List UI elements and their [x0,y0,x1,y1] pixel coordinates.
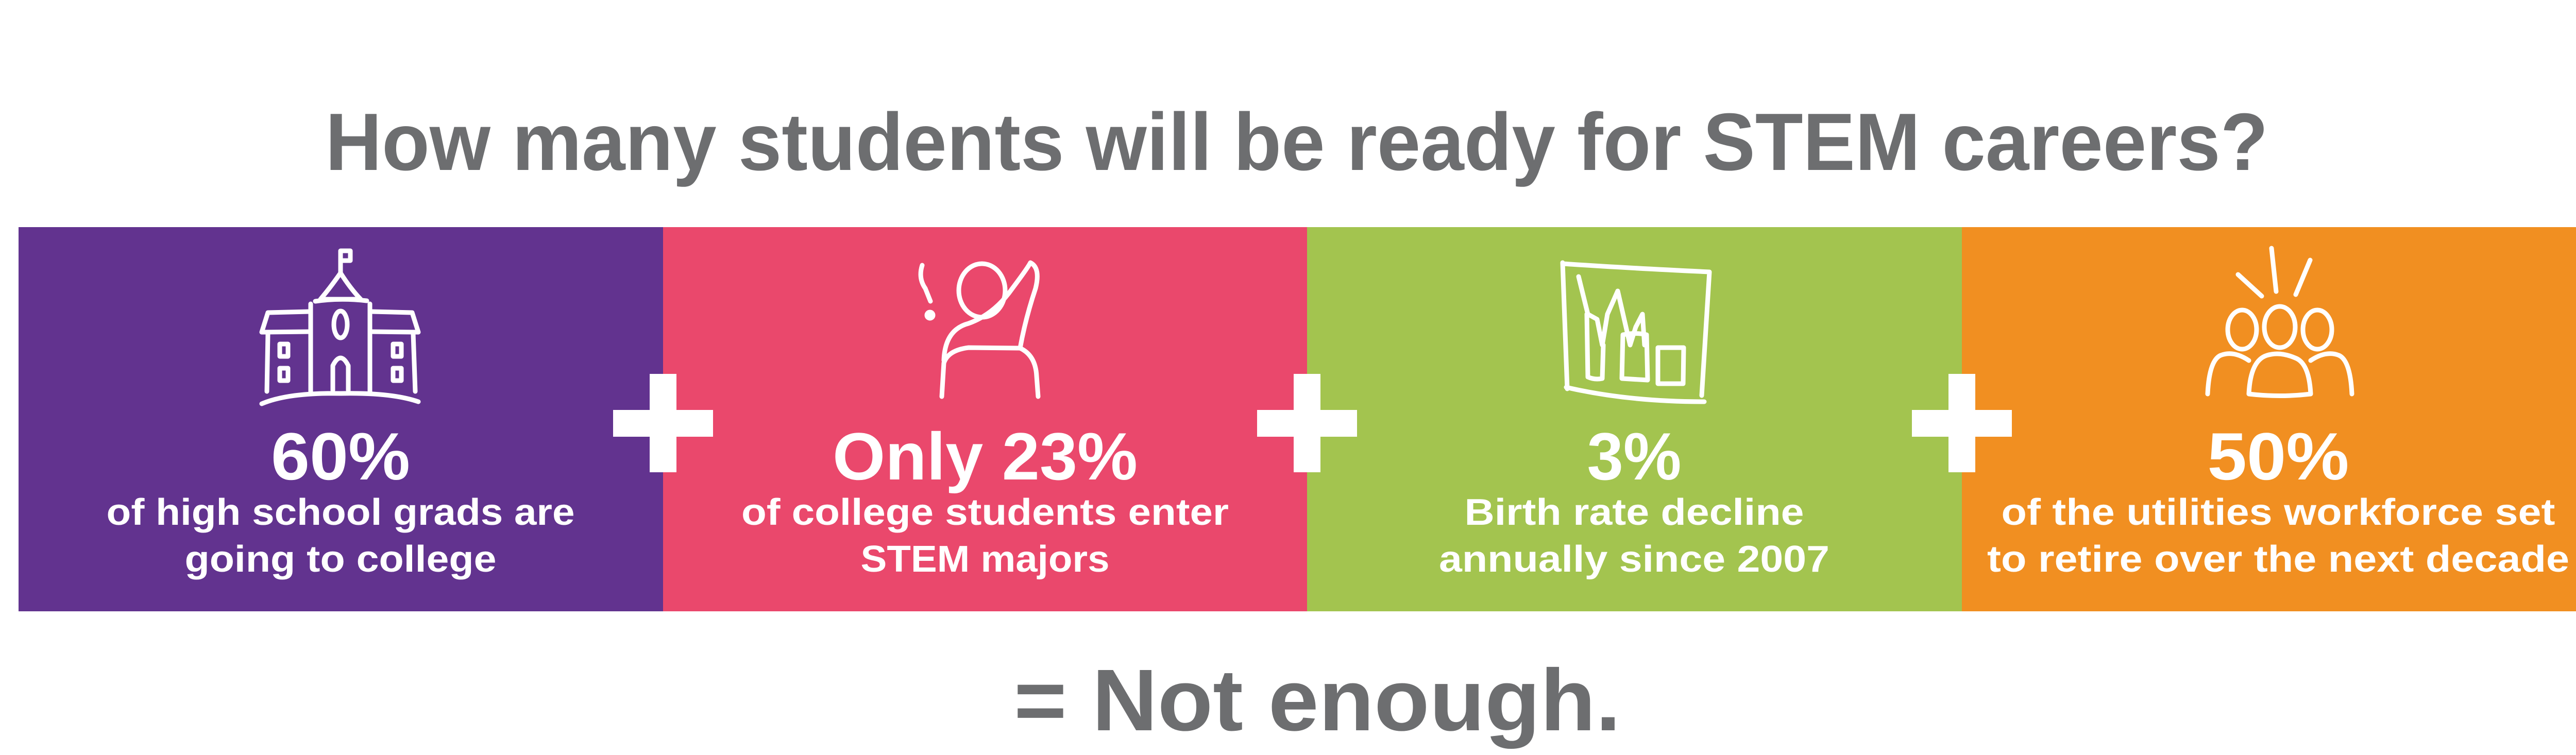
icon: plus sign 3 [1912,374,2012,472]
text: workforce description [1987,492,2569,580]
panel: retiring workforce [1962,227,2576,611]
text: workforce description: of the utilities workforce set [2001,492,2555,533]
icon: school [262,251,418,404]
panel: birth rate [1307,227,1962,611]
text: STEM majors description: STEM majors [860,539,1110,580]
text: STEM majors description: of college students enter [741,492,1229,533]
text: STEM majors description [741,492,1229,580]
icon: plus sign 1 [613,374,713,472]
stat: 60%: 60% [271,419,410,494]
text: birth rate description: annually since 2007 [1439,539,1829,580]
panel: STEM majors [663,227,1307,611]
text: birth rate description [1439,492,1829,580]
panel: high school grads [19,227,663,611]
icon: plus sign 2 [1257,374,1357,472]
text: birth rate description: Birth rate decline [1464,492,1804,533]
stat: 50%: 50% [2207,419,2349,494]
icon: group of people [2208,248,2352,396]
stat: 3%: 3% [1587,419,1682,494]
title: How many students will be ready for STEM careers? [326,97,2268,187]
conclusion: = Not enough. [1014,651,1621,749]
stat: Only 23%: Only 23% [833,419,1138,494]
icon: raised-hand student [921,263,1038,397]
text: high school grads description: of high school grads are [106,492,575,533]
text: high school grads description [106,492,575,580]
icon: declining chart [1563,263,1709,402]
text: high school grads description: going to college [184,539,497,580]
text: workforce description: to retire over the next decade [1987,539,2569,580]
